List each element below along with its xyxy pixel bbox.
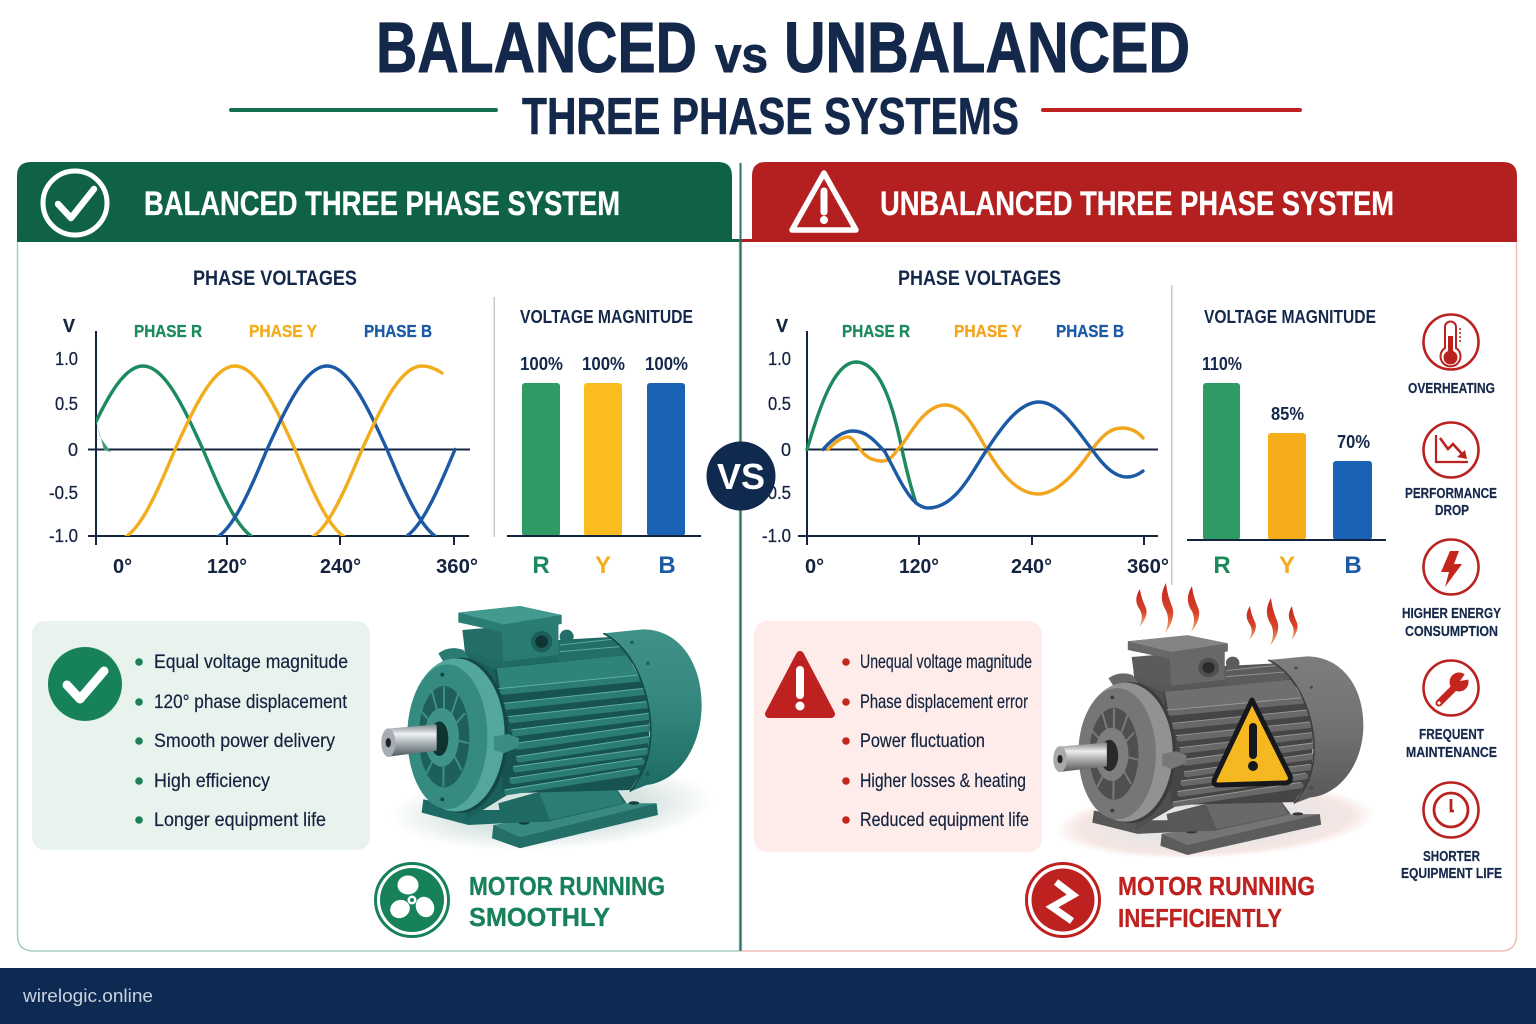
line chart: balanced waveforms — [49, 316, 478, 578]
panel: balanced system — [17, 162, 741, 951]
heading: phase voltages: PHASE VOLTAGES — [898, 267, 1061, 290]
title: BALANCED — [376, 9, 697, 88]
bar chart: unbalanced voltage magnitude: 85% — [1271, 404, 1304, 424]
header: balanced — [17, 162, 732, 242]
line chart: unbalanced waveforms — [762, 316, 1169, 578]
problems box: Reduced equipment life — [860, 810, 1029, 831]
effect: overheating — [1408, 314, 1495, 397]
effect: frequent maintenance: MAINTENANCE — [1406, 745, 1497, 761]
status: motor running smoothly — [376, 864, 665, 936]
panel: unbalanced system — [741, 162, 1517, 951]
effect: higher energy consumption — [1402, 540, 1501, 640]
line chart: balanced waveforms: PHASE B — [364, 321, 432, 341]
bar chart: balanced voltage magnitude — [507, 307, 701, 579]
effect: performance drop: DROP — [1435, 503, 1469, 519]
bar chart: unbalanced voltage magnitude — [1187, 307, 1386, 579]
line chart: unbalanced waveforms: -1.0 — [762, 526, 791, 546]
line chart: balanced waveforms: 0 — [68, 440, 78, 460]
effect: shorter equipment life — [1401, 782, 1502, 882]
line chart: unbalanced waveforms: PHASE B — [1056, 321, 1124, 341]
bar chart: unbalanced voltage magnitude: R — [1213, 552, 1231, 579]
effect: performance drop: PERFORMANCE — [1405, 486, 1497, 502]
effect: frequent maintenance: FREQUENT — [1419, 727, 1484, 743]
problems box: Unequal voltage magnitude — [860, 652, 1032, 673]
effect: shorter equipment life: SHORTER — [1423, 849, 1480, 865]
benefits box: Longer equipment life — [154, 810, 326, 831]
title — [376, 9, 1190, 88]
status: motor running inefficiently — [1026, 864, 1315, 936]
benefits box: Smooth power delivery — [154, 731, 335, 752]
badge: VS — [706, 442, 776, 510]
line chart: balanced waveforms: 0.5 — [55, 394, 78, 414]
line chart: balanced waveforms: 360° — [436, 556, 478, 578]
problems box — [754, 621, 1042, 852]
bar chart: balanced voltage magnitude: 100% — [582, 354, 625, 374]
line chart: unbalanced waveforms: 1.0 — [768, 349, 791, 369]
effect: higher energy consumption: HIGHER ENERGY — [1402, 606, 1501, 622]
title: UNBALANCED — [784, 9, 1190, 88]
line chart: unbalanced waveforms: V — [776, 316, 788, 336]
problems box: Power fluctuation — [860, 731, 985, 752]
effect: performance drop — [1405, 422, 1497, 519]
status: motor running smoothly: MOTOR RUNNING — [469, 871, 665, 901]
line chart: balanced waveforms: -1.0 — [49, 526, 78, 546]
line chart: balanced waveforms: 240° — [320, 556, 361, 578]
line chart: balanced waveforms: V — [63, 316, 75, 336]
line chart: unbalanced waveforms: 0 — [781, 440, 791, 460]
illustration: green motor — [381, 606, 716, 858]
line chart: unbalanced waveforms: 120° — [899, 556, 939, 578]
heading: phase voltages: PHASE VOLTAGES — [193, 267, 357, 290]
effect: higher energy consumption: CONSUMPTION — [1405, 624, 1498, 640]
icon: heat waves — [1136, 583, 1298, 646]
line chart: unbalanced waveforms: 0.5 — [768, 394, 791, 414]
bar chart: balanced voltage magnitude: R — [532, 552, 550, 579]
bar chart: unbalanced voltage magnitude: 110% — [1202, 354, 1242, 374]
bar chart: unbalanced voltage magnitude: Y — [1279, 552, 1295, 579]
benefits box: High efficiency — [154, 771, 270, 792]
line chart: unbalanced waveforms: 0° — [805, 556, 824, 578]
line chart: balanced waveforms: PHASE Y — [249, 321, 317, 341]
problems box: Phase displacement error — [860, 692, 1029, 713]
status: motor running smoothly: SMOOTHLY — [469, 902, 610, 932]
line chart: unbalanced waveforms: -0.5 — [762, 483, 791, 503]
benefits box: 120° phase displacement — [154, 692, 348, 713]
benefits box — [32, 621, 370, 850]
bar chart: balanced voltage magnitude: B — [658, 552, 676, 579]
bar chart: balanced voltage magnitude: 100% — [520, 354, 563, 374]
effect: overheating: OVERHEATING — [1408, 381, 1495, 397]
bar chart: balanced voltage magnitude: Y — [595, 552, 611, 579]
bar chart: unbalanced voltage magnitude: 70% — [1337, 432, 1370, 452]
header: balanced: BALANCED THREE PHASE SYSTEM — [144, 185, 620, 223]
subtitle: THREE PHASE SYSTEMS — [522, 88, 1019, 146]
line chart: unbalanced waveforms: PHASE R — [842, 321, 910, 341]
bar chart: balanced voltage magnitude: 100% — [645, 354, 688, 374]
line chart: balanced waveforms: -0.5 — [49, 483, 78, 503]
benefits box: Equal voltage magnitude — [154, 652, 348, 673]
problems box: Higher losses & heating — [860, 771, 1026, 792]
line chart: balanced waveforms: 120° — [207, 556, 247, 578]
badge: VS: VS — [717, 456, 765, 497]
header: unbalanced: UNBALANCED THREE PHASE SYSTEM — [880, 185, 1394, 223]
status: motor running inefficiently: INEFFICIENTLY — [1118, 903, 1282, 933]
effect: frequent maintenance — [1406, 660, 1497, 761]
bar chart: unbalanced voltage magnitude: VOLTAGE MAGNITUDE — [1204, 307, 1376, 327]
header: unbalanced — [752, 162, 1517, 242]
line chart: unbalanced waveforms: 360° — [1127, 556, 1169, 578]
line chart: balanced waveforms: PHASE R — [134, 321, 202, 341]
line chart: balanced waveforms: 0° — [113, 556, 132, 578]
line chart: unbalanced waveforms: PHASE Y — [954, 321, 1022, 341]
bar chart: balanced voltage magnitude: VOLTAGE MAGNITUDE — [520, 307, 693, 327]
effect: shorter equipment life: EQUIPMENT LIFE — [1401, 866, 1502, 882]
title: vs — [715, 27, 768, 83]
line chart: balanced waveforms: 1.0 — [55, 349, 78, 369]
status: motor running inefficiently: MOTOR RUNNING — [1118, 871, 1315, 901]
illustration: overheating grey motor — [1053, 583, 1377, 866]
footer — [0, 968, 1536, 1024]
bar chart: unbalanced voltage magnitude: B — [1344, 552, 1362, 579]
line chart: unbalanced waveforms: 240° — [1011, 556, 1052, 578]
footer: wirelogic.online — [22, 986, 153, 1006]
